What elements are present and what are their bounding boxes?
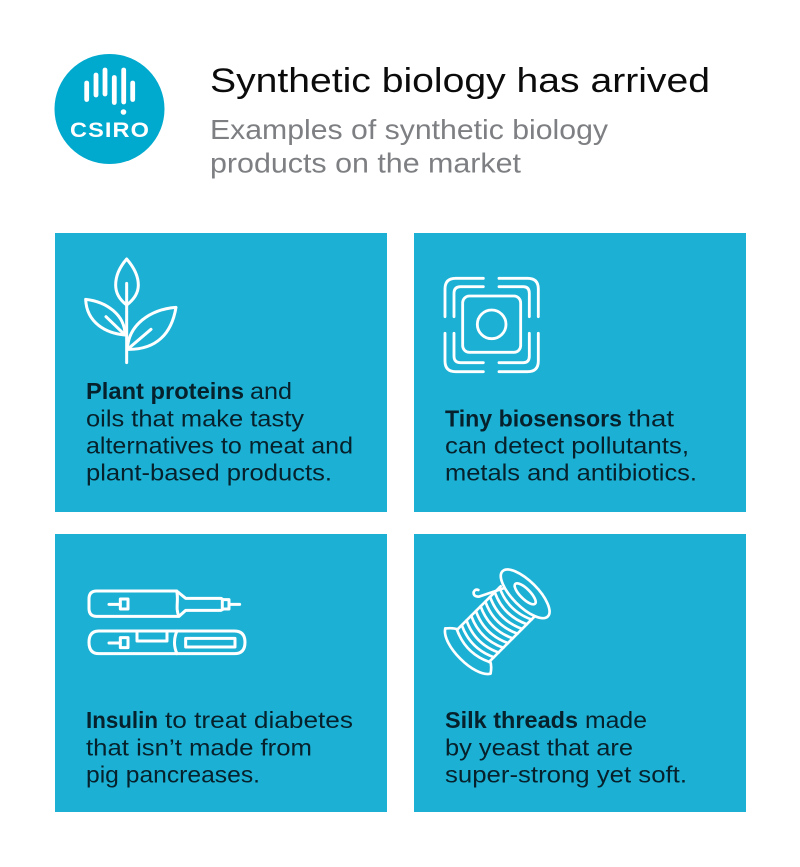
text: plant proteins: plant-based products. <box>86 460 332 486</box>
title: Synthetic biology has arrived <box>210 62 710 100</box>
panel: insulin <box>55 534 387 812</box>
text: insulin <box>86 707 353 788</box>
text: plant proteins <box>86 378 353 486</box>
text: silk threads <box>445 707 687 788</box>
icon: plant <box>86 259 176 363</box>
text: plant proteins: oils that make tasty <box>86 405 305 431</box>
icon: thread spool <box>438 562 557 681</box>
text: silk threads: made <box>585 707 647 733</box>
text: tiny biosensors: can detect pollutants, <box>445 432 689 458</box>
text: plant proteins: alternatives to meat and <box>86 432 353 458</box>
text: tiny biosensors <box>445 405 697 486</box>
panel: tiny biosensors <box>414 233 746 512</box>
text: plant proteins: and <box>250 378 292 404</box>
text: plant proteins: Plant proteins <box>86 378 244 404</box>
logo: CSIRO <box>54 54 164 164</box>
text: insulin: Insulin <box>86 707 158 733</box>
icon: insulin pens <box>89 591 245 654</box>
text: silk threads: super-strong yet soft. <box>445 762 687 788</box>
text: insulin: that isn’t made from <box>86 734 312 760</box>
text: tiny biosensors: metals and antibiotics. <box>445 460 697 486</box>
text: tiny biosensors: Tiny biosensors <box>445 405 622 431</box>
text: insulin: to treat diabetes <box>165 707 353 733</box>
text: insulin: pig pancreases. <box>86 762 260 788</box>
subtitle: Examples of synthetic biology <box>210 114 608 145</box>
text: tiny biosensors: that <box>628 405 675 431</box>
logo: CSIRO: CSIRO <box>70 118 150 142</box>
subtitle <box>210 114 608 179</box>
subtitle: products on the market <box>210 148 521 179</box>
panel: plant proteins <box>55 233 387 512</box>
text: silk threads: Silk threads <box>445 707 578 733</box>
panel: silk threads <box>414 534 746 812</box>
text: silk threads: by yeast that are <box>445 734 633 760</box>
icon: biosensor <box>445 278 538 372</box>
